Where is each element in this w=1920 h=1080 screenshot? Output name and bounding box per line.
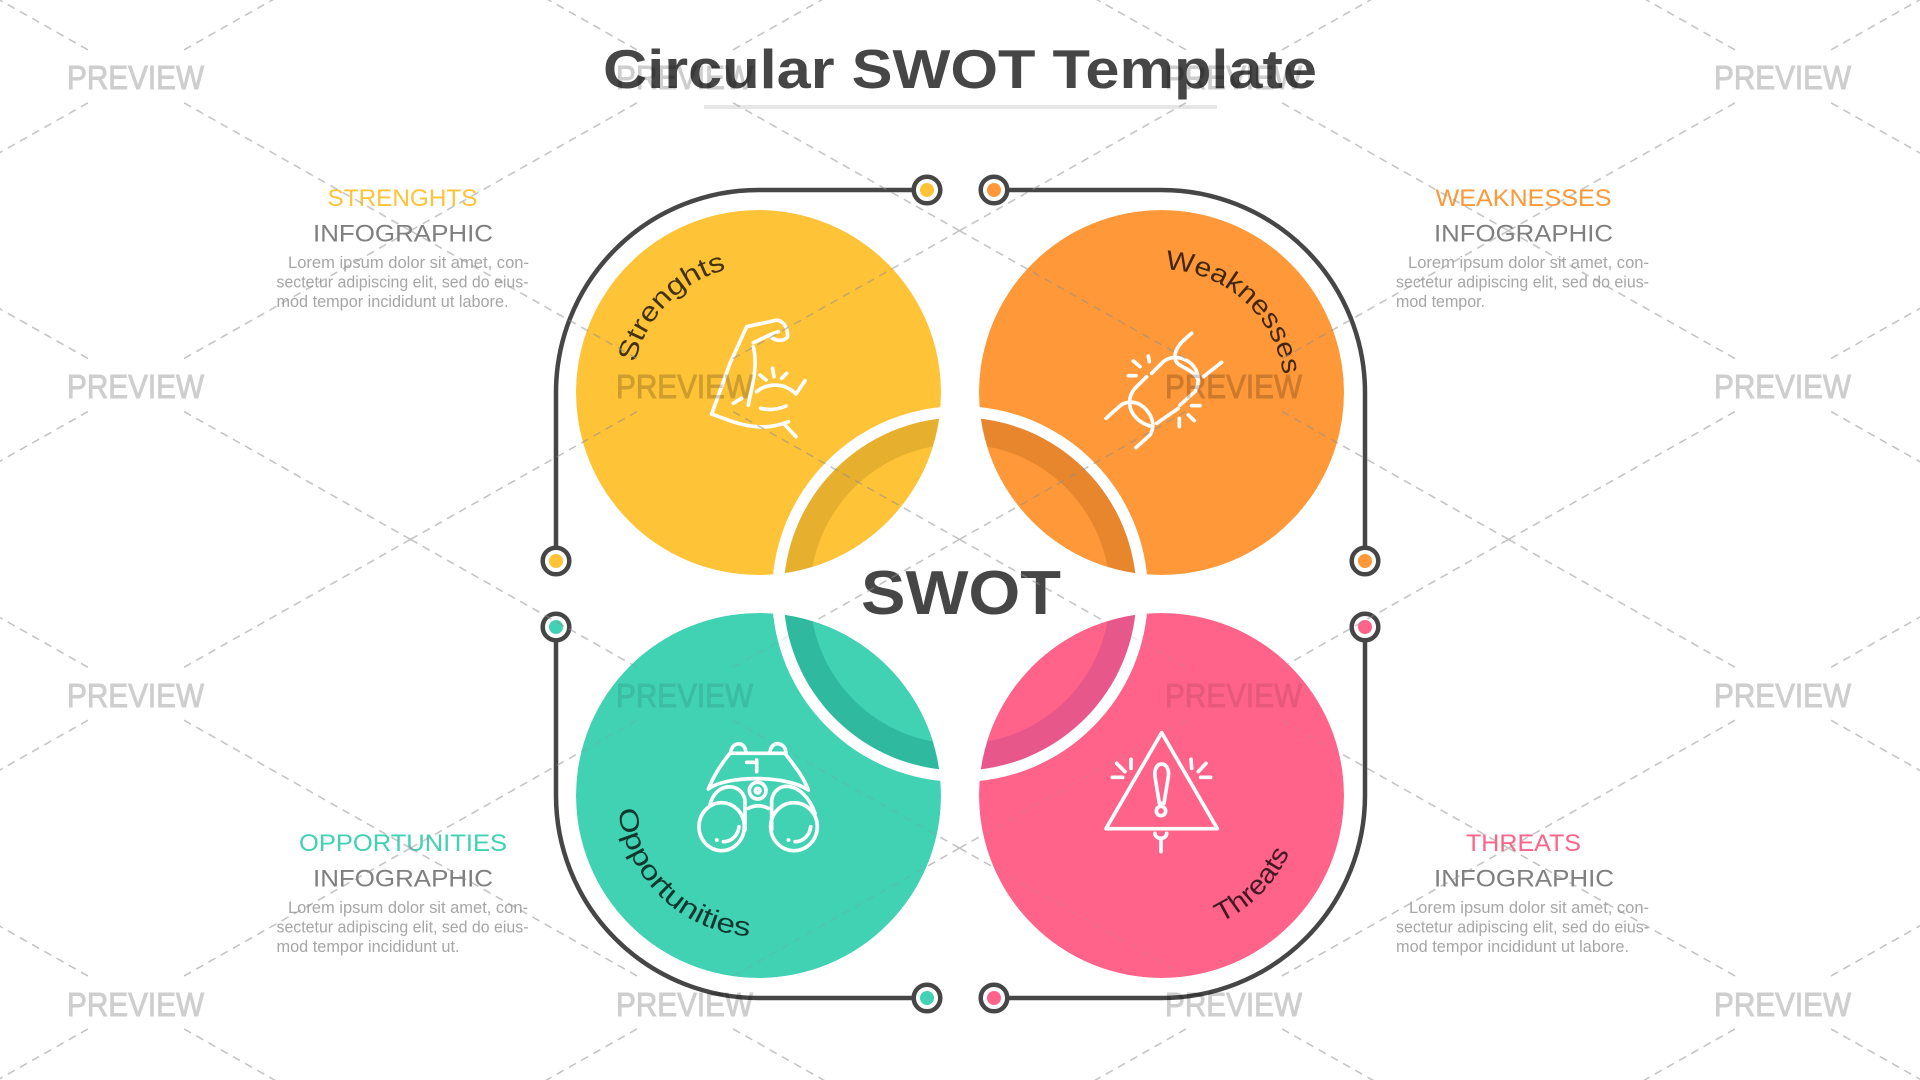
text block: strengths: STRENGHTS [328,185,478,212]
watermark overlay: PREVIEW [1165,60,1302,97]
watermark overlay: PREVIEW [67,60,204,97]
connector: threats outline [981,614,1378,1011]
curved label: Weaknesses: Weaknesses [1168,250,1296,374]
curved label: Strenghts: Strenghts [619,257,724,360]
text block: opportunities [276,830,528,956]
watermark overlay: PREVIEW [67,678,204,715]
text block: weaknesses: mod tempor. [1396,293,1485,311]
icon: broken chain [1106,333,1222,448]
watermark overlay: PREVIEW [67,987,204,1024]
text block: strengths: mod tempor incididunt ut labore. [276,293,508,311]
watermark overlay: PREVIEW [1714,987,1851,1024]
icon: binoculars [699,744,817,851]
text block: threats: INFOGRAPHIC [1434,866,1614,892]
text block: strengths: sectetur adipiscing elit, sed do eius- [276,274,528,292]
title: Circular SWOT Template [603,38,1317,100]
text block: threats: sectetur adipiscing elit, sed do eius- [1396,918,1649,936]
text block: strengths: INFOGRAPHIC [313,220,493,248]
watermark overlay: PREVIEW [1165,369,1302,406]
text block: weaknesses: sectetur adipiscing elit, sed do eius- [1396,274,1649,292]
text block: threats [1396,830,1649,956]
text block: weaknesses: WEAKNESSES [1436,185,1612,212]
panel: weaknesses circle [979,210,1344,575]
text block: strengths [276,185,529,311]
text block: threats: mod tempor incididunt ut labore. [1396,938,1629,956]
watermark overlay: PREVIEW [1165,987,1302,1024]
text block: opportunities: mod tempor incididunt ut. [276,938,460,956]
curved label: Opportunities: Opportunities [618,809,750,936]
text block: strengths: Lorem ipsum dolor sit amet, con- [288,254,529,272]
watermark overlay: PREVIEW [1714,369,1851,406]
text block: threats: THREATS [1466,830,1581,857]
text block: opportunities: INFOGRAPHIC [313,866,493,892]
icon: flexed muscle [712,320,805,437]
text block: weaknesses: Lorem ipsum dolor sit amet, con- [1408,254,1649,272]
watermark overlay: PREVIEW [67,369,204,406]
watermark overlay: PREVIEW [1714,60,1851,97]
watermark overlay: PREVIEW [616,369,753,406]
watermark overlay: PREVIEW [616,60,753,97]
curved label: Threats: Threats [1212,848,1288,919]
connector: opportunities outline [543,614,940,1011]
watermark overlay: PREVIEW [1714,678,1851,715]
connector: strengths outline [543,177,940,574]
watermark overlay: PREVIEW [616,678,753,715]
text block: threats: Lorem ipsum dolor sit amet, con- [1409,899,1649,917]
watermark overlay: PREVIEW [1165,678,1302,715]
text block: opportunities: OPPORTUNITIES [299,830,507,857]
panel: opportunities circle [576,613,941,978]
panel: strengths circle [576,210,941,575]
panel: threats circle [979,613,1344,978]
center label: SWOT: SWOT [861,559,1061,628]
text block: opportunities: sectetur adipiscing elit, sed do eius- [276,918,528,936]
connector: weaknesses outline [981,177,1378,574]
text block: weaknesses [1396,185,1649,311]
watermark overlay: PREVIEW [616,987,753,1024]
text block: weaknesses: INFOGRAPHIC [1434,220,1613,248]
text block: opportunities: Lorem ipsum dolor sit amet, con- [288,899,528,917]
icon: warning triangle [1106,733,1217,852]
